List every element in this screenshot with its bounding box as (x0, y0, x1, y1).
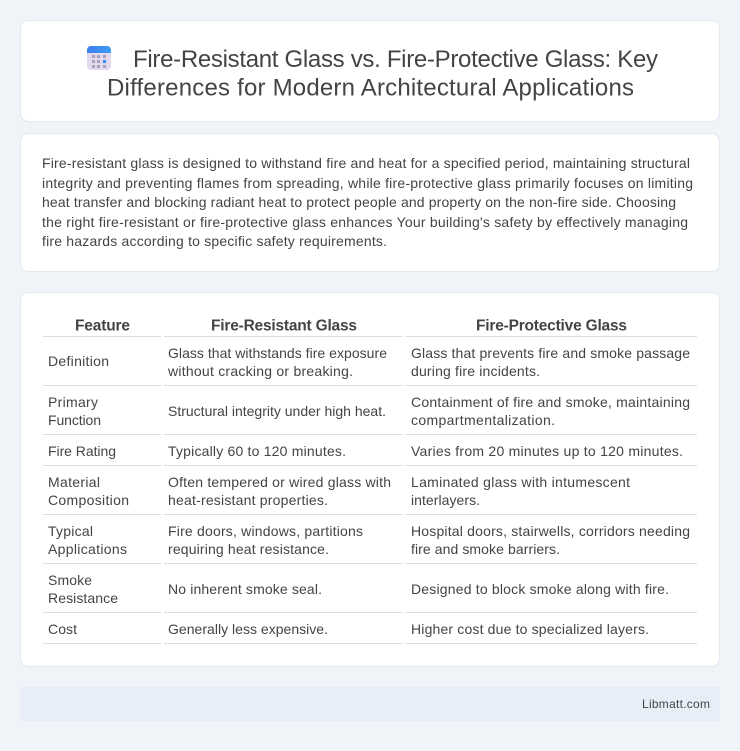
row: cost: Higher cost due to specialized layers. (411, 621, 649, 637)
row: definition (48, 345, 690, 379)
row: material composition: Composition (48, 492, 129, 508)
row: primary function: Structural integrity under high heat. (168, 403, 386, 419)
row: smoke resistance: Smoke (48, 572, 92, 588)
row: definition: Definition (48, 353, 109, 369)
row: typical applications: Fire doors, windows, partitions (168, 523, 363, 539)
row: typical applications: Applications (48, 541, 127, 557)
row: primary function: compartmentalization. (411, 412, 555, 428)
row: primary function: Primary (48, 394, 98, 410)
text block: intro: the right fire-resistant or fire-protective glass enhances Your building's safety by effectively managing (42, 214, 688, 230)
row: typical applications (48, 523, 690, 557)
row: definition: Glass that withstands fire exposure (168, 345, 387, 361)
row: fire rating: Fire Rating (48, 443, 116, 459)
row: cost: Generally less expensive. (168, 621, 328, 637)
row: material composition: heat-resistant properties. (168, 492, 328, 508)
title: Fire-Resistant Glass vs. Fire-Protective Glass: Key (133, 46, 658, 73)
row: material composition (48, 474, 630, 508)
row: smoke resistance: Resistance (48, 590, 118, 606)
row: typical applications: Typical (48, 523, 93, 539)
row: material composition: Often tempered or wired glass with (168, 474, 391, 490)
row: primary function (48, 394, 690, 428)
row: fire rating (48, 443, 683, 459)
table header (75, 318, 627, 334)
row: typical applications: fire and smoke barriers. (411, 541, 560, 557)
row: smoke resistance: Designed to block smoke along with fire. (411, 581, 669, 597)
row: fire rating: Typically 60 to 120 minutes. (168, 443, 346, 459)
title: Differences for Modern Architectural Applications (107, 74, 634, 102)
table header: Feature (75, 318, 130, 334)
row: smoke resistance (48, 572, 669, 606)
text block: intro: fire hazards according to specific safety requirements. (42, 233, 387, 249)
row: definition: during fire incidents. (411, 363, 540, 379)
footer (20, 687, 720, 721)
row: fire rating: Varies from 20 minutes up to 120 minutes. (411, 443, 683, 459)
panel: title header (20, 20, 720, 122)
row: typical applications: Hospital doors, stairwells, corridors needing (411, 523, 690, 539)
row: cost (48, 621, 649, 637)
row: cost: Cost (48, 621, 77, 637)
panel: intro paragraph (20, 134, 720, 272)
table header: Fire-Resistant Glass (211, 318, 357, 334)
row: definition: Glass that prevents fire and smoke passage (411, 345, 690, 361)
footer credit: Libmatt.com (642, 697, 710, 711)
icon: calendar (87, 46, 111, 70)
panel: comparison table (20, 292, 720, 666)
row: smoke resistance: No inherent smoke seal. (168, 581, 322, 597)
row: primary function: Containment of fire and smoke, maintaining (411, 394, 690, 410)
text block: intro: integrity and preventing flames from spreading, while fire-protective glass primarily focuses on limiting (42, 175, 693, 191)
row: material composition: interlayers. (411, 492, 480, 508)
row: primary function: Function (48, 412, 101, 428)
text block: intro (42, 155, 693, 249)
title (107, 46, 658, 102)
table header: Fire-Protective Glass (476, 318, 627, 334)
row: material composition: Laminated glass with intumescent (411, 474, 630, 490)
text block: intro: Fire-resistant glass is designed to withstand fire and heat for a specified period, maintaining structural (42, 155, 690, 171)
row: material composition: Material (48, 474, 100, 490)
text block: intro: heat transfer and blocking radiant heat to protect people and property on the non-fire side. Choosing (42, 194, 676, 210)
row: definition: without cracking or breaking. (167, 363, 353, 379)
row: typical applications: requiring heat resistance. (168, 541, 329, 557)
